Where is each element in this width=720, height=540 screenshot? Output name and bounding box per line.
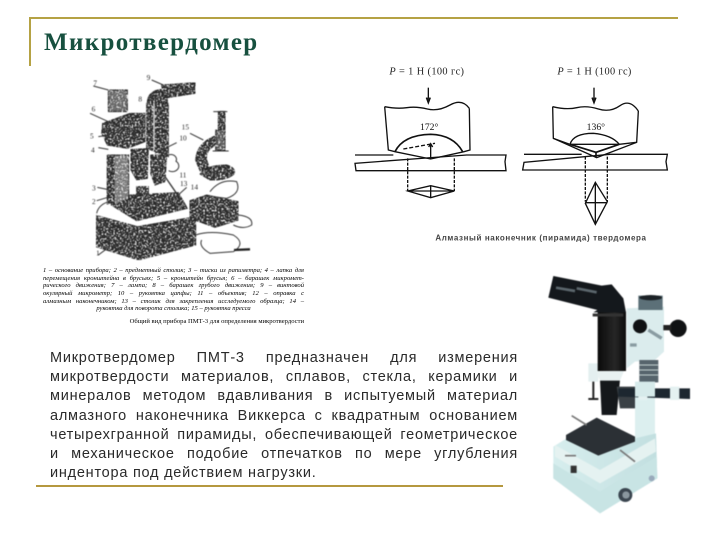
base	[553, 433, 657, 513]
part numbers: 4	[91, 145, 95, 154]
description text: минералов методом вдавливания в испытуемый материал	[50, 388, 518, 404]
upper body	[627, 307, 664, 368]
illustration caption: 1 – основание прибора; 2 – предметный столик; 3 – тиски из рапиметра; 4 – лапка для	[43, 267, 304, 274]
frame rule: left gold line	[29, 17, 31, 66]
press arm	[196, 136, 216, 171]
part numbers	[90, 73, 198, 257]
black tube	[598, 312, 626, 371]
description text: индентора под действием нагрузки.	[50, 465, 317, 481]
part numbers: 11	[179, 170, 187, 179]
press base	[200, 165, 235, 180]
part numbers: 15	[182, 122, 189, 131]
angle label 136: 136°	[587, 122, 605, 133]
part numbers: 10	[179, 134, 187, 143]
stage	[566, 418, 635, 456]
title: Микротвердомер	[44, 29, 259, 56]
base label and knob	[571, 466, 577, 473]
left bracket	[588, 363, 598, 382]
stage	[111, 193, 187, 221]
illustration caption: окулярный микрометр; 10 – рукоятка цапфы; 11 – объектив; 12 – оправка с	[43, 290, 304, 297]
base	[96, 215, 139, 260]
description text: четырехгранной пирамиды, обеспечивающей геометрическое	[50, 427, 518, 443]
part numbers: 3	[92, 184, 96, 193]
part numbers: 6	[92, 105, 96, 114]
indenter 136 degrees	[523, 88, 667, 224]
illustration caption: Общий вид прибора ПМТ-3 для определения микротвердости	[130, 318, 304, 325]
head	[102, 113, 145, 148]
diagram: diamond indenter pyramids	[354, 66, 668, 242]
part numbers: 14	[191, 182, 198, 191]
pillar	[635, 397, 655, 438]
indenter 172 degrees	[355, 88, 506, 198]
specimen post	[137, 187, 148, 196]
part numbers: 5	[90, 131, 94, 140]
angle label 172: 172°	[420, 122, 438, 133]
load label left: P = 1 Н (100 гс)	[388, 66, 464, 77]
column	[107, 155, 129, 204]
illustration caption	[42, 267, 304, 325]
illustration caption: перемещения кронштейна в брусьях; 5 – кронштейн брусья; 6 – барашек микромет-	[43, 275, 304, 282]
part numbers: 7	[93, 78, 97, 87]
photo: PMT-3 microhardness tester	[548, 275, 691, 514]
objective	[600, 380, 620, 415]
illustration caption: алмазным наконечником; 13 – столик для закрепления исследуемого образца; 14 –	[43, 298, 304, 305]
description text: Микротвердомер ПМТ-3 предназначен для измерения	[50, 350, 518, 366]
part numbers: 9	[147, 73, 151, 82]
description text: алмазного наконечника Виккерса с квадратным основанием	[50, 408, 518, 424]
illustration: PMT-3 device line drawing	[89, 73, 254, 261]
camera head	[548, 276, 626, 312]
nosepiece	[131, 149, 148, 180]
eyepiece	[162, 83, 195, 98]
press tube	[216, 130, 225, 150]
black knobs	[633, 319, 647, 333]
bottom gold rule	[36, 485, 503, 487]
illustration caption: рукоятка для поворота столика; 15 – рукоятка пресса	[96, 305, 251, 312]
load label right: P = 1 Н (100 гс)	[556, 66, 631, 77]
illustration caption: рического движения; 7 – лампа; 8 – барашек грубого движения; 9 – винтовой	[43, 282, 304, 289]
part numbers: 1	[96, 248, 100, 257]
part numbers: 8	[138, 95, 142, 104]
description text: и механическое подобие отпечатков по мере углубления	[50, 446, 518, 462]
diagram caption: Алмазный наконечник (пирамида) твердомера	[435, 233, 647, 242]
side arm	[618, 388, 690, 399]
frame rule: top gold line	[29, 17, 678, 19]
description text: микротвердости материалов, сплавов, стекла, керамики и	[50, 369, 518, 385]
control box	[190, 195, 238, 227]
tube	[147, 103, 168, 157]
description text	[50, 350, 518, 481]
cables and leaders	[90, 80, 252, 255]
part numbers: 13	[180, 179, 188, 188]
part numbers: 2	[92, 197, 96, 206]
lamp housing	[108, 90, 127, 112]
